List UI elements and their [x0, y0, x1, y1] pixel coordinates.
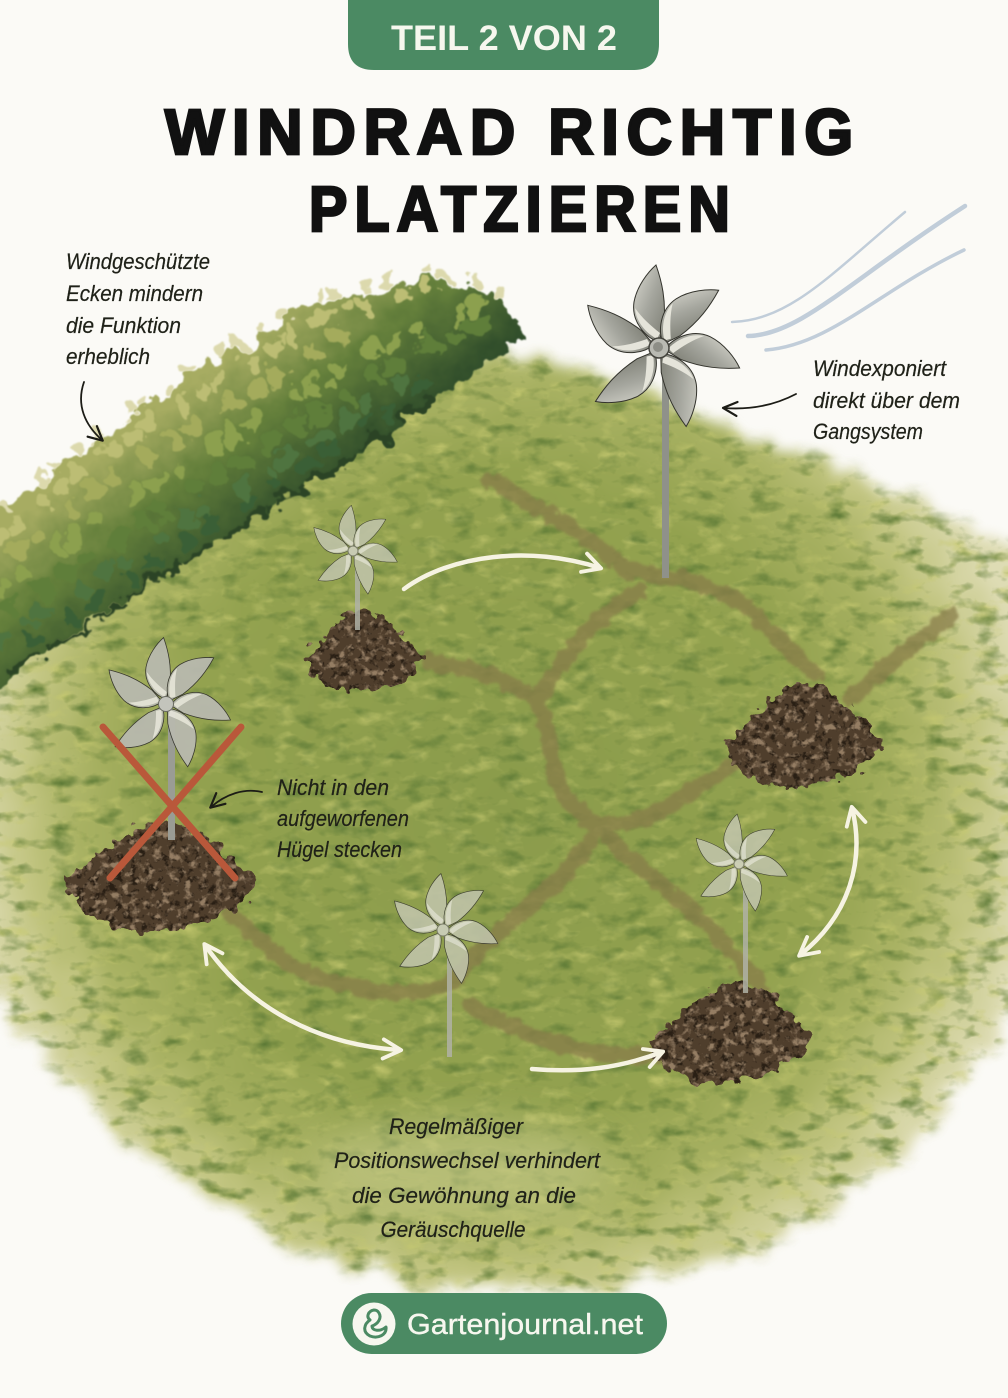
note: sheltered corners [66, 249, 210, 440]
footer badge: Gartenjournal.net: Gartenjournal.net [407, 1309, 643, 1341]
note: wind-exposed [724, 356, 960, 444]
title [165, 96, 861, 245]
tunnel paths [230, 480, 950, 1056]
molehill: bottom right [650, 982, 812, 1083]
note: wind-exposed: direkt über dem [813, 388, 960, 413]
note: wind-exposed: Windexponiert [813, 356, 947, 381]
note: change position regularly: Geräuschquelle [380, 1217, 526, 1242]
note: not in molehill: aufgeworfenen [277, 806, 409, 831]
note: sheltered corners: erheblich [66, 344, 150, 369]
note: change position regularly: Regelmäßiger [389, 1114, 525, 1139]
note: sheltered corners: Ecken mindern [66, 281, 203, 306]
note: wind-exposed: Gangsystem [813, 419, 923, 444]
lawn [0, 345, 1008, 1285]
wind lines [732, 206, 965, 350]
molehill: left [64, 822, 258, 932]
note: change position regularly: die Gewöhnung an die [352, 1183, 576, 1208]
pinwheel: bottom right [689, 814, 791, 993]
pinwheel: on top-centre molehill [307, 505, 401, 630]
molehill: right [724, 682, 884, 788]
pinwheel: bottom centre [386, 874, 502, 1057]
title: WINDRAD RICHTIG [165, 96, 861, 168]
note: not in molehill [211, 775, 409, 862]
molehill: top centre [304, 610, 422, 690]
note: change position regularly [334, 1114, 601, 1242]
note: not in molehill: Nicht in den [277, 775, 389, 800]
title: PLATZIEREN [309, 173, 737, 245]
note: sheltered corners: Windgeschützte [66, 249, 210, 274]
note: sheltered corners: die Funktion [66, 313, 181, 338]
pinwheel: crossed out, in molehill [99, 638, 235, 840]
footer badge: Gartenjournal.net [341, 1293, 667, 1354]
hedge [0, 268, 525, 690]
pinwheel: large, over tunnel [576, 265, 746, 578]
note: not in molehill: Hügel stecken [277, 837, 402, 862]
white arrows [205, 556, 856, 1070]
note: change position regularly: Positionswechsel verhindert [334, 1148, 601, 1173]
badge: Teil 2 von 2 [348, 0, 659, 70]
badge: Teil 2 von 2: TEIL 2 VON 2 [391, 19, 617, 58]
red cross [103, 727, 241, 878]
